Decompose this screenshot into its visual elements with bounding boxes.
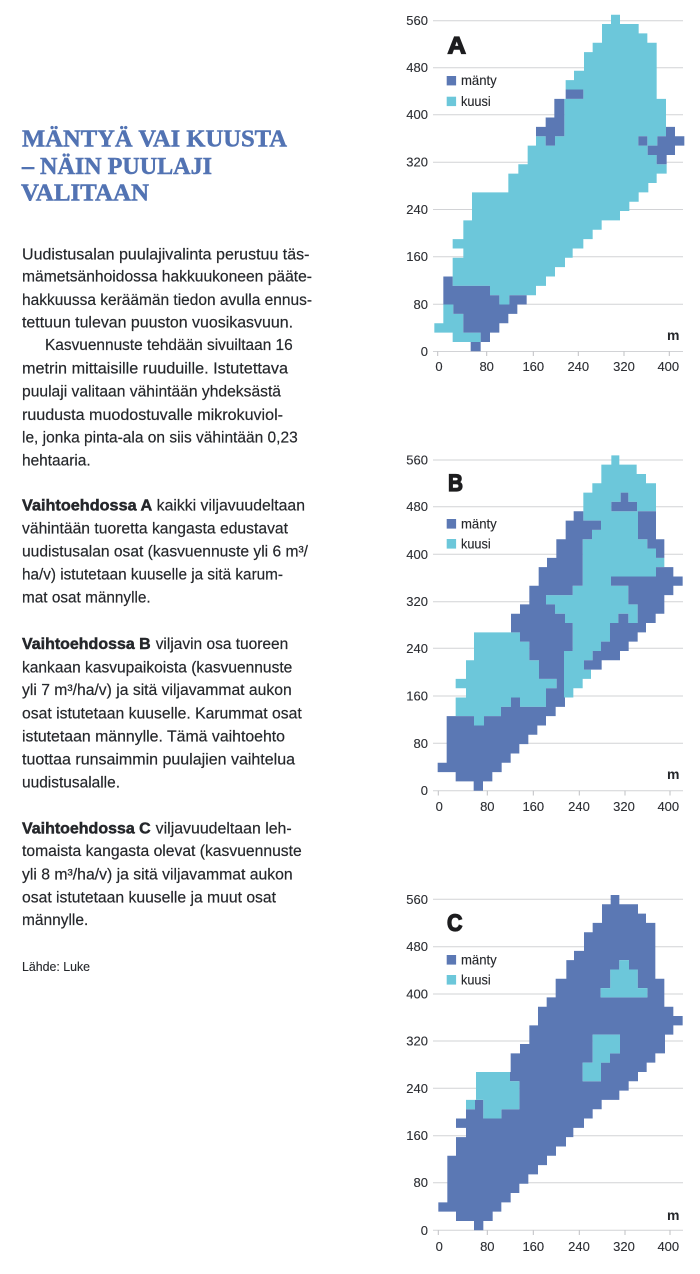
x axis labels C: 320 — [613, 1239, 635, 1254]
y axis labels A: 0 — [421, 344, 428, 359]
panel: map A — [406, 13, 684, 374]
text block: option A: vähintään tuoretta kangasta edustavat — [22, 520, 289, 537]
x axis labels B: 400 — [657, 799, 679, 814]
text block: option C: osat istutetaan kuuselle ja muut osat — [22, 890, 277, 907]
y axis labels B: 320 — [406, 594, 428, 609]
title: VALITAAN — [21, 180, 149, 207]
text block: option C: männylle. — [22, 912, 88, 929]
legend C: kuusi — [461, 971, 491, 987]
species grid A — [434, 19, 684, 347]
x axis labels C: 240 — [568, 1239, 590, 1254]
text block: introduction: puulaji valitaan vähintään yhdeksästä — [22, 384, 281, 401]
legend B: mänty — [461, 515, 497, 531]
text block: option B: uudistusalalle. — [22, 775, 120, 792]
text block: introduction: le, jonka pinta-ala on siis vähintään 0,23 — [22, 429, 298, 446]
x axis labels A: 400 — [657, 359, 679, 374]
title: MÄNTYÄ VAI KUUSTA — [22, 126, 287, 153]
text block: introduction: ruudusta muodostuvalle mikrokuviol- — [22, 407, 283, 424]
x axis labels B: 320 — [613, 799, 635, 814]
x axis labels C: 400 — [657, 1239, 679, 1254]
y axis labels C: 480 — [406, 939, 428, 954]
x axis labels A: 0 — [435, 359, 443, 374]
legend A: kuusi — [461, 93, 491, 109]
y axis labels C: 80 — [414, 1175, 428, 1190]
panel: map B — [406, 452, 683, 814]
x axis labels C: 0 — [436, 1239, 443, 1254]
y axis labels B: 0 — [421, 783, 428, 798]
y axis labels A: 320 — [406, 155, 428, 170]
y axis labels A: 80 — [414, 297, 428, 312]
text block: introduction: mämetsänhoidossa hakkuukoneen pääte- — [22, 269, 312, 286]
source note: Lähde: Luke — [22, 960, 90, 974]
text block: option A — [22, 498, 309, 606]
text block: option B: viljavin osa tuoreen — [156, 636, 288, 653]
x axis labels C — [436, 1239, 679, 1254]
species grid C — [438, 900, 683, 1226]
legend B: kuusi — [461, 535, 491, 551]
y axis labels C: 320 — [406, 1034, 428, 1048]
legend B — [447, 515, 497, 551]
y axis labels C: 400 — [406, 986, 428, 1002]
text block: introduction: hehtaaria. — [22, 453, 91, 470]
text block: option C: Vaihtoehdossa C — [22, 820, 151, 837]
y axis labels A: 560 — [406, 13, 428, 28]
y axis labels B: 400 — [406, 547, 428, 562]
map letter B: B — [448, 470, 463, 497]
unit label C: m — [667, 1207, 679, 1223]
text block: option C — [22, 820, 302, 929]
legend A — [447, 72, 497, 109]
y axis labels C: 560 — [406, 892, 428, 907]
text block: option A: mat osat männylle. — [22, 589, 151, 606]
text block: introduction — [22, 246, 312, 470]
x axis labels B: 240 — [568, 799, 590, 814]
x axis labels B — [436, 799, 679, 814]
x axis labels A: 80 — [479, 359, 494, 374]
text block: option A: uudistusalan osat (kasvuennuste yli 6 m³/ — [22, 544, 309, 561]
text block: introduction: hakkuussa keräämän tiedon avulla ennus- — [22, 292, 312, 309]
x axis labels B: 80 — [480, 799, 495, 814]
text block: introduction: Kasvuennuste tehdään sivuiltaan 16 — [45, 337, 293, 354]
legend A: mänty — [461, 72, 497, 88]
x axis labels A: 160 — [522, 359, 544, 374]
x axis labels B: 160 — [522, 799, 544, 814]
text block: option C: yli 8 m³/ha/v) ja sitä viljavammat aukon — [22, 866, 293, 883]
y axis labels A: 240 — [406, 202, 428, 217]
y axis labels B: 560 — [406, 452, 428, 468]
text block: option C: tomaista kangasta olevat (kasvuennuste — [22, 843, 302, 860]
y axis labels A: 480 — [406, 60, 428, 75]
text block: option A: ha/v) istutetaan kuuselle ja sitä karum- — [22, 566, 283, 583]
map letter C: C — [447, 910, 462, 937]
x axis labels C: 160 — [522, 1239, 544, 1254]
text block: option A: kaikki viljavuudeltaan — [157, 498, 305, 515]
y axis labels C: 240 — [406, 1081, 428, 1096]
text block: option B: Vaihtoehdossa B — [22, 636, 151, 653]
x axis labels C: 80 — [480, 1239, 495, 1254]
title — [21, 126, 287, 207]
text block: option A: Vaihtoehdossa A — [22, 498, 152, 515]
y axis labels A: 160 — [406, 249, 428, 264]
x axis labels A: 320 — [613, 359, 635, 374]
y axis labels B: 240 — [406, 641, 428, 656]
unit label A: m — [667, 327, 679, 343]
y axis labels B: 160 — [406, 688, 428, 704]
map letter A: A — [448, 32, 466, 59]
text block: option C: viljavuudeltaan leh- — [156, 820, 292, 837]
y axis labels A — [406, 13, 428, 359]
text block: introduction: metrin mittaisille ruuduille. Istutettava — [22, 360, 288, 377]
text block: option B — [22, 636, 302, 792]
legend C — [447, 951, 497, 987]
title: – NÄIN PUULAJI — [21, 153, 212, 180]
x axis labels A: 240 — [567, 359, 589, 374]
text block: option B: kankaan kasvupaikoista (kasvuennuste — [22, 660, 292, 677]
x axis labels A — [435, 359, 679, 374]
x axis labels B: 0 — [436, 799, 443, 814]
y axis labels C: 0 — [421, 1223, 428, 1238]
text block: option B: istutetaan männylle. Tämä vaihtoehto — [22, 729, 285, 746]
legend C: mänty — [461, 951, 497, 967]
text block: introduction: tettuun tulevan puuston vuosikasvuun. — [22, 314, 293, 331]
text block: option B: tuottaa runsaimmin puulajien vaihtelua — [22, 751, 295, 768]
text block: option B: yli 7 m³/ha/v) ja sitä viljavammat aukon — [22, 682, 292, 699]
unit label B: m — [667, 766, 679, 782]
y axis labels C: 160 — [406, 1128, 428, 1143]
y axis labels B — [406, 452, 428, 798]
text block: option B: osat istutetaan kuuselle. Karummat osat — [22, 705, 302, 722]
y axis labels A: 400 — [406, 107, 428, 122]
panel: map C — [406, 892, 683, 1254]
y axis labels B: 80 — [414, 736, 428, 751]
text block: introduction: Uudistusalan puulajivalinta perustuu täs- — [22, 246, 310, 263]
y axis labels C — [406, 892, 428, 1238]
y axis labels B: 480 — [406, 499, 428, 514]
species grid B — [438, 460, 683, 786]
